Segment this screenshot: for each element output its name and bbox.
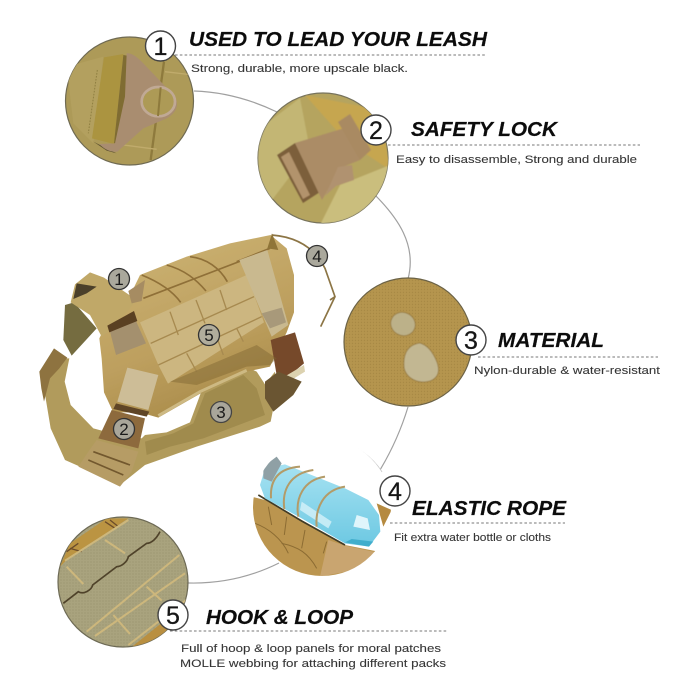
connector lines between detail circles [188, 91, 410, 583]
number 4 [380, 476, 410, 506]
number 5 [158, 600, 188, 630]
badge 5 [198, 324, 220, 346]
webbing blocks [255, 507, 327, 568]
top rows of webbing [142, 248, 270, 302]
description [180, 643, 447, 670]
heading: MATERIAL [498, 330, 604, 352]
right shoulder strap [239, 250, 288, 337]
description: Fit extra water bottle or cloths [394, 532, 552, 544]
heading: ELASTIC ROPE [412, 498, 567, 520]
number 2 [361, 115, 391, 145]
badge 4: 4 [312, 247, 322, 266]
badge 3 [210, 402, 232, 422]
light webbing lines [65, 520, 188, 645]
webbing [92, 54, 123, 144]
clip tip [325, 165, 354, 196]
yellow corners [60, 518, 128, 567]
dark bottle shadow [258, 495, 345, 545]
main back panel [99, 235, 294, 418]
badge 2 [114, 418, 134, 440]
front shoulder strap [117, 368, 158, 410]
description: MOLLE webbing for attaching different packs [180, 658, 447, 670]
number 3 [456, 325, 486, 355]
triangle ring [99, 53, 177, 152]
feature 4: elastic rope [380, 476, 567, 544]
detail circle 4: elastic rope with water bottle [252, 438, 392, 578]
buckle left bars [277, 143, 320, 203]
velcro patch and shoulder [110, 321, 146, 355]
number 1 [146, 31, 176, 61]
right buckle [271, 332, 304, 385]
dark inner lining [63, 302, 97, 356]
feature 1: used to lead your leash [146, 29, 488, 75]
number 1: 1 [154, 33, 167, 61]
water drops [387, 308, 439, 382]
trim along panel bottom [158, 370, 247, 416]
badge 2: 2 [119, 420, 129, 439]
front strap and buckle [98, 410, 145, 448]
badge 1: 1 [114, 270, 124, 289]
harness illustration [39, 233, 335, 487]
belly panel shade [145, 375, 265, 455]
heading: HOOK & LOOP [206, 607, 354, 629]
MOLLE patch panel [140, 275, 264, 384]
water bottle [260, 464, 380, 547]
detail circle 2: safety buckle [258, 93, 390, 225]
rope [272, 235, 335, 327]
heading: SAFETY LOCK [411, 119, 559, 141]
chest strap and belly panel [44, 358, 277, 485]
buckle plate [295, 127, 360, 200]
feature 2: safety lock [361, 115, 640, 166]
neck handle [71, 272, 137, 337]
detail circle 5: hook and loop panels [58, 517, 188, 650]
badge 3: 3 [216, 403, 226, 422]
tan pocket [252, 497, 378, 578]
number 4: 4 [388, 478, 402, 506]
badge 1 [108, 268, 130, 290]
description: Easy to disassemble, Strong and durable [396, 154, 637, 166]
detail circle 3: water-resistant material [344, 278, 472, 406]
harness callout badges [108, 246, 328, 440]
detail circle 1: leash ring [66, 37, 194, 165]
dark scalloped seam [63, 532, 160, 603]
number 2: 2 [369, 117, 383, 145]
badge 4 [306, 246, 328, 266]
badge 5: 5 [204, 326, 214, 345]
number 5: 5 [166, 602, 180, 630]
description: Nylon-durable & water-resistant [474, 365, 660, 377]
fabric seams [68, 64, 78, 84]
right bar [338, 114, 371, 160]
feature 5: hook and loop [158, 600, 447, 670]
feature 3: material [456, 325, 660, 377]
leash ring [128, 280, 145, 303]
number 3: 3 [464, 327, 478, 355]
elastic rope [271, 467, 345, 527]
description: Strong, durable, more upscale black. [191, 63, 408, 75]
shadow [170, 345, 277, 385]
side buckle left [39, 348, 67, 402]
heading: USED TO LEAD YOUR LEASH [189, 29, 488, 51]
description: Full of hoop & loop panels for moral patches [181, 643, 442, 655]
